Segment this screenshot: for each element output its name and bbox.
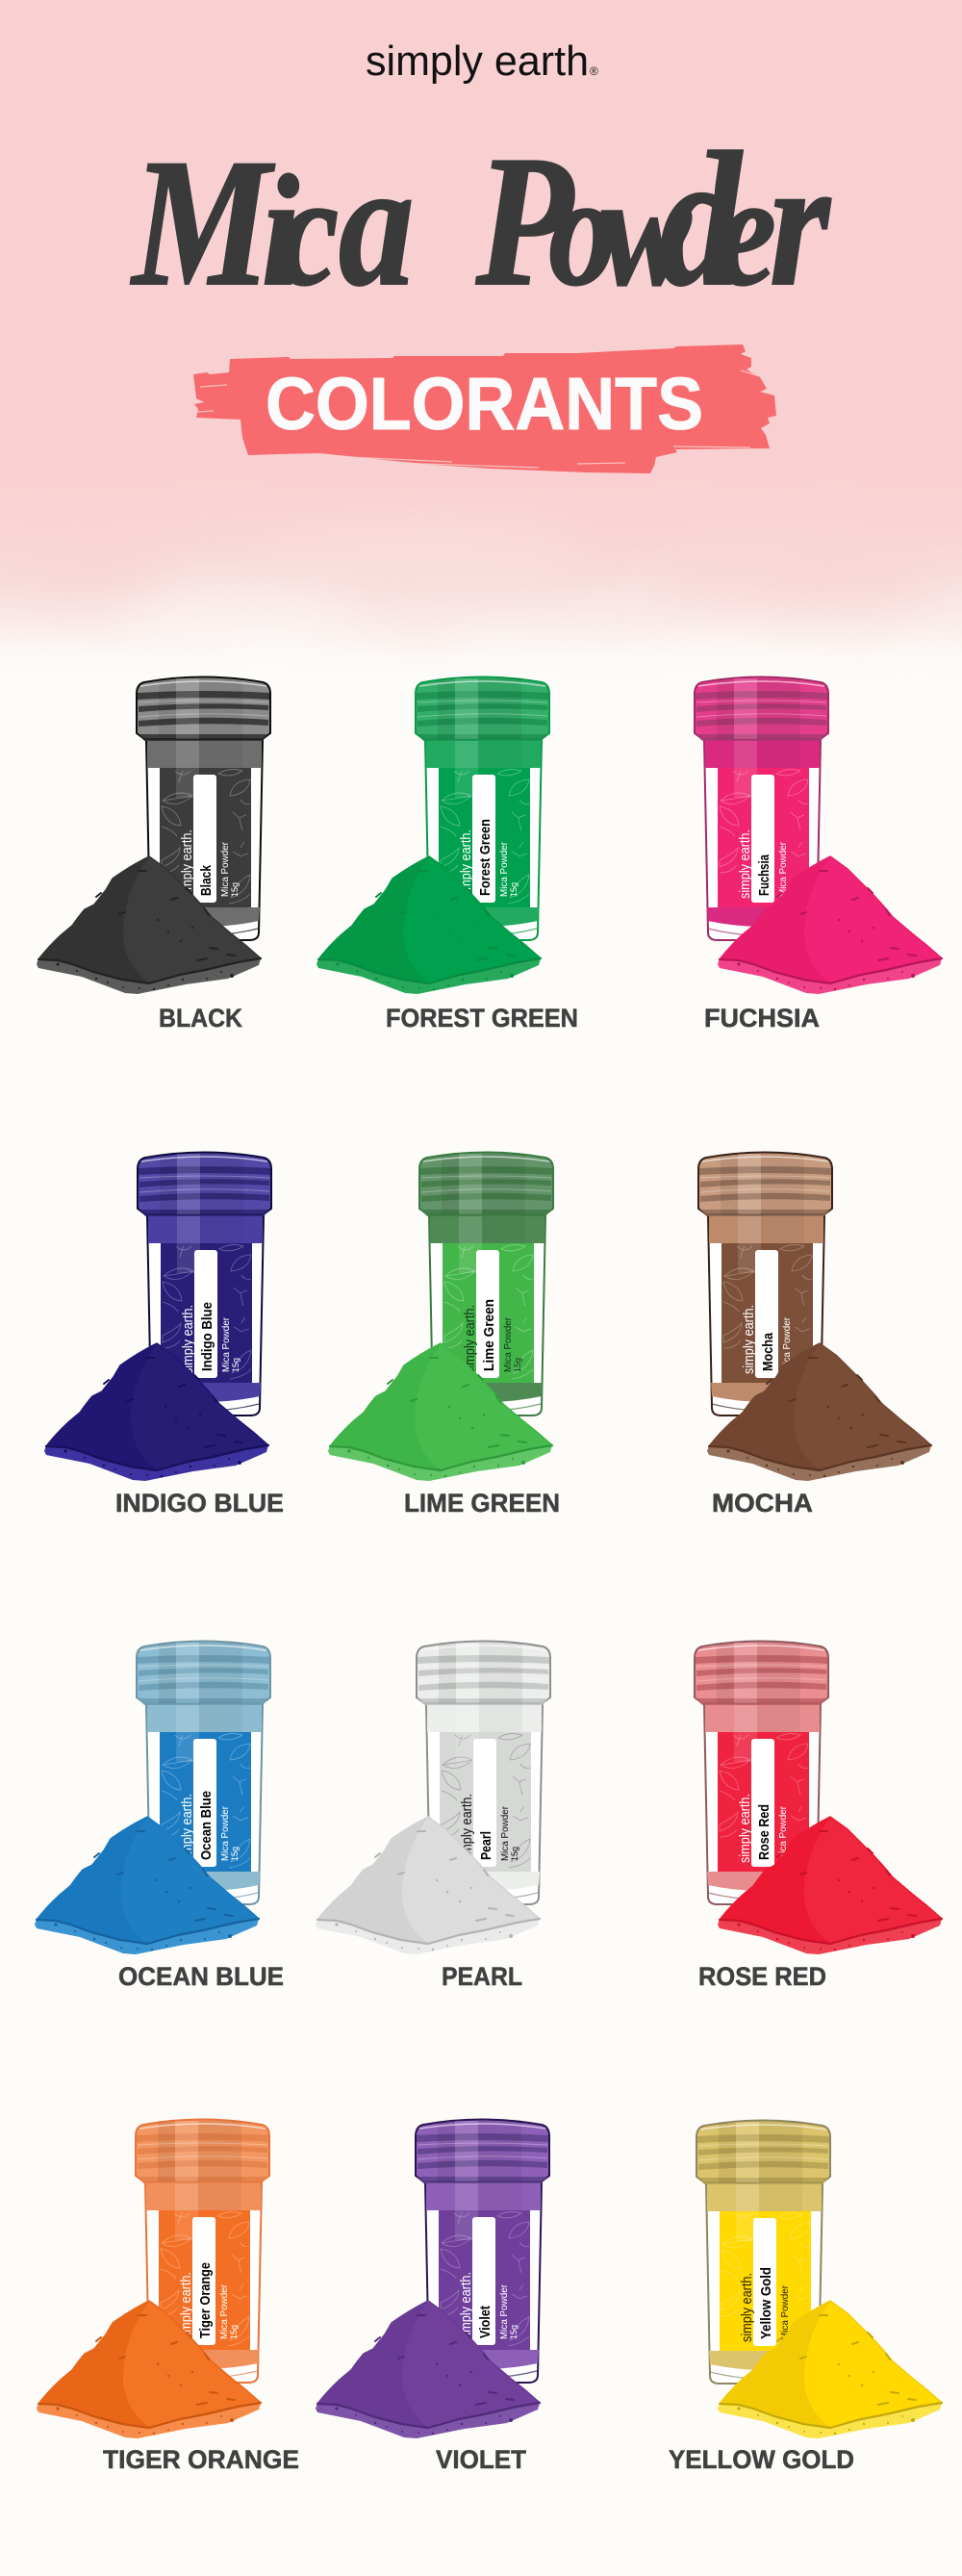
bottle <box>695 677 828 940</box>
caption: ROSE RED <box>698 1962 826 1991</box>
jar <box>137 677 270 940</box>
bottle <box>696 2121 830 2384</box>
logo: simply earth: ® <box>590 64 598 78</box>
jar label text: Mica Powder <box>778 841 789 897</box>
jar label text: simply earth. <box>180 1305 196 1374</box>
jar <box>695 1642 828 1904</box>
powder pile <box>316 856 541 994</box>
title: Mica Powder: w <box>601 144 692 319</box>
powder pile <box>328 1343 552 1481</box>
jar label text: Violet <box>477 2306 494 2338</box>
bottle <box>416 677 549 940</box>
bottle <box>698 1153 832 1416</box>
title: Mica Powder: o <box>548 144 616 319</box>
jar label text: 15g <box>513 1358 522 1372</box>
bottle <box>695 1642 828 1904</box>
dry brush streaks <box>197 370 760 468</box>
powder pile <box>718 1817 942 1954</box>
product: Rose Red <box>695 1642 942 1991</box>
bottle <box>136 2119 269 2383</box>
jar label text: 15g <box>231 1358 240 1372</box>
caption: FOREST GREEN <box>386 1004 578 1033</box>
jar label text: Mica Powder <box>782 1316 793 1372</box>
title: Mica Powder: P <box>475 118 574 325</box>
jar label text: simply earth. <box>459 1794 475 1863</box>
jar label text: simply earth. <box>179 1794 195 1863</box>
jar label text: Mica Powder <box>220 1805 231 1861</box>
jar label text: 15g <box>509 2325 519 2339</box>
title: Mica Powder: a <box>339 126 415 323</box>
jar label text: Forest Green <box>477 819 494 896</box>
product: Fuchsia <box>695 677 942 1033</box>
caption: INDIGO BLUE <box>115 1489 284 1518</box>
jar label text: Mica Powder <box>500 1805 511 1861</box>
product: Pearl <box>316 1642 550 1991</box>
jar label text: Mica Powder <box>499 841 510 897</box>
title: Mica Powder: i <box>262 144 299 319</box>
jar <box>696 2121 830 2384</box>
bottle <box>419 1153 553 1416</box>
jar label text: simply earth. <box>739 2273 755 2342</box>
jar label text: Mica Powder <box>221 1316 232 1372</box>
jar label text: 15g <box>510 1847 519 1861</box>
title: Mica Powder: e <box>717 144 776 319</box>
jar <box>695 677 828 940</box>
bottle <box>137 1642 270 1904</box>
product: Ocean Blue <box>35 1642 284 1991</box>
jar label text: Mica Powder <box>780 2284 791 2340</box>
caption: MOCHA <box>712 1489 813 1518</box>
jar label text: Indigo Blue <box>199 1302 215 1371</box>
title: Mica Powder: M <box>130 122 275 324</box>
title: Mica Powder: c <box>279 144 339 319</box>
caption: VIOLET <box>436 2445 526 2474</box>
powder pile <box>718 2301 942 2438</box>
jar label text <box>739 2267 799 2342</box>
product: Violet <box>316 2119 549 2474</box>
jar label text: 15g <box>229 2325 239 2339</box>
caption: PEARL <box>442 1962 522 1991</box>
jar label text: simply earth. <box>179 829 195 899</box>
jar label text: Black <box>198 864 215 896</box>
jar label text: Yellow Gold <box>758 2267 774 2339</box>
jar label text: 15g <box>792 1358 801 1372</box>
jar label text: simply earth. <box>741 1305 757 1374</box>
jar label text: 15g <box>230 1847 240 1861</box>
jar label text <box>458 819 519 899</box>
powder pile <box>37 2301 261 2438</box>
jar label text <box>179 829 240 899</box>
caption: YELLOW GOLD <box>669 2445 854 2474</box>
product: Indigo Blue <box>44 1153 284 1518</box>
brush stroke <box>193 344 776 473</box>
jar <box>136 2119 269 2383</box>
caption: TIGER ORANGE <box>103 2445 299 2474</box>
jar label text: Ocean Blue <box>198 1791 215 1860</box>
powder pile <box>316 2301 540 2438</box>
jar label text: simply earth. <box>458 2272 474 2341</box>
jar label text: Mica Powder <box>778 1805 789 1861</box>
header: pink watercolour wash <box>0 0 962 693</box>
jar <box>419 1153 553 1416</box>
jar <box>138 1153 271 1416</box>
powder pile <box>35 1817 259 1954</box>
jar label text <box>459 1794 519 1863</box>
jar label text: simply earth. <box>462 1305 478 1374</box>
jar label text: Mocha <box>760 1332 776 1371</box>
jar label text <box>178 2262 239 2341</box>
jar label text: Fuchsia <box>756 854 772 896</box>
bottle <box>137 677 270 940</box>
jar label text <box>180 1302 240 1374</box>
jar <box>417 1642 550 1904</box>
jar label text <box>737 1794 797 1863</box>
jar label text: Mica Powder <box>499 2283 510 2339</box>
jar label text: Pearl <box>478 1831 494 1860</box>
powder pile <box>707 1343 931 1481</box>
caption: OCEAN BLUE <box>118 1962 284 1991</box>
jar label text <box>458 2272 519 2341</box>
caption: FUCHSIA <box>704 1004 820 1033</box>
jar label text <box>741 1305 801 1374</box>
jar label text: Rose Red <box>756 1804 772 1860</box>
jar label text: simply earth. <box>737 829 753 899</box>
word: COLORANTS: COLORANTS <box>266 363 703 446</box>
jar label text <box>179 1791 240 1863</box>
jar <box>137 1642 270 1904</box>
jar label text: simply earth. <box>458 829 474 899</box>
jar label text: Tiger Orange <box>197 2262 214 2338</box>
product: Mocha <box>698 1153 931 1518</box>
title: Mica Powder: r <box>770 122 831 324</box>
jar label text: Mica Powder <box>219 2283 230 2339</box>
jar <box>698 1153 832 1416</box>
product: Black <box>37 677 270 1033</box>
powder pile <box>44 1343 268 1481</box>
logo: simply earth: simply earth <box>366 38 589 85</box>
jar <box>416 677 549 940</box>
caption: LIME GREEN <box>404 1489 560 1518</box>
product: Tiger Orange <box>37 2119 299 2474</box>
jar label text: Mica Powder <box>220 841 231 897</box>
powder pile <box>316 1817 540 1954</box>
bottle <box>416 2119 549 2383</box>
jar label text: Mica Powder <box>503 1316 514 1372</box>
product: Yellow Gold <box>669 2121 942 2474</box>
jar label text: simply earth. <box>737 1794 753 1863</box>
jar label text: 15g <box>790 2326 799 2340</box>
banner: coral brush stroke with COLORANTS <box>193 344 776 473</box>
title: Mica Powder <box>130 114 831 326</box>
bottle <box>417 1642 550 1904</box>
jar label text: simply earth. <box>178 2272 194 2341</box>
jar label text: Lime Green <box>481 1299 497 1371</box>
bottle <box>138 1153 271 1416</box>
jar label text: 15g <box>230 882 240 897</box>
jar label text: 15g <box>788 882 797 897</box>
powder pile <box>37 856 261 994</box>
title: Mica Powder: d <box>659 114 744 326</box>
jar label text <box>737 829 797 899</box>
product: Forest Green <box>316 677 578 1033</box>
jar label text: 15g <box>788 1847 797 1861</box>
product: Lime Green <box>328 1153 560 1518</box>
caption: BLACK <box>159 1004 242 1033</box>
powder pile <box>718 856 942 994</box>
jar label text: 15g <box>509 882 519 897</box>
jar label text <box>462 1299 522 1374</box>
jar <box>416 2119 549 2383</box>
